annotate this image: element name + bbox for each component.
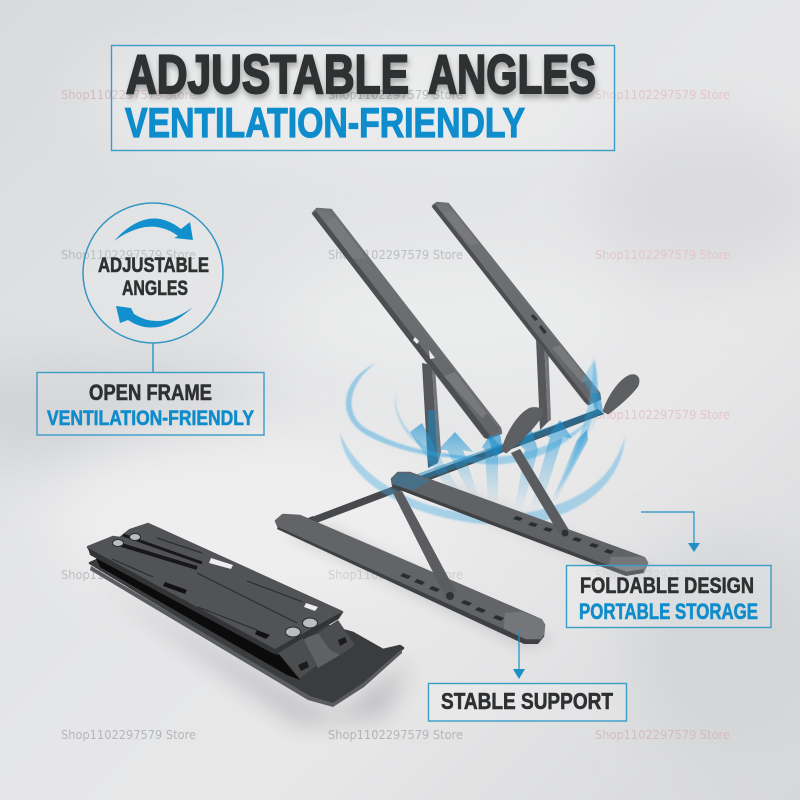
dark interior — [95, 556, 300, 680]
floor shadow — [285, 485, 660, 650]
left riser — [422, 363, 438, 468]
cross bar — [304, 409, 604, 527]
hinge pins — [302, 618, 318, 628]
heading: adjustable angles: ADJUSTABLE — [126, 43, 409, 105]
curved air arcs — [340, 357, 625, 525]
upward air streams — [410, 423, 460, 492]
arrow: stable support pointer — [513, 630, 525, 679]
watermark: store name repeated: Shop1102297579 Store — [595, 88, 730, 102]
label: foldable design: FOLDABLE DESIGN — [580, 573, 754, 598]
right arm — [433, 203, 600, 404]
right riser — [536, 338, 548, 430]
arrow: foldable design pointer — [641, 512, 700, 552]
front base rail — [276, 515, 544, 642]
icon: upper rotation arrow — [114, 218, 193, 241]
base plate — [90, 560, 403, 703]
front base vent slots — [400, 573, 504, 621]
label: ventilation-friendly: VENTILATION-FRIENDLY — [47, 407, 254, 430]
front support leg — [393, 491, 456, 596]
hinge brackets — [278, 638, 317, 678]
floor shadow — [90, 575, 410, 725]
panel: open frame — [37, 372, 264, 435]
top plate — [88, 524, 342, 653]
watermark: store name repeated: Shop1102297579 Store — [595, 408, 730, 422]
panel: foldable design — [566, 566, 771, 628]
watermark: store name repeated — [61, 88, 730, 742]
centre hinge recess — [300, 632, 340, 668]
right end hook — [604, 376, 638, 413]
blue tint over cross bar — [392, 409, 604, 490]
rear base vent slots — [513, 516, 614, 554]
heading: adjustable angles: ANGLES — [428, 43, 596, 105]
icon: lower rotation arrow — [116, 306, 193, 328]
left arm — [313, 209, 501, 438]
watermark: store name repeated: Shop1102297579 Store — [328, 728, 463, 742]
watermark: store name repeated: Shop1102297579 Store — [328, 568, 463, 582]
watermark: store name repeated: Shop1102297579 Store — [595, 248, 730, 262]
panel: title — [112, 43, 614, 150]
illustration: open laptop stand — [276, 203, 660, 650]
watermark: store name repeated: Shop1102297579 Store — [595, 568, 730, 582]
label: open frame: OPEN FRAME — [89, 380, 212, 405]
watermark: store name repeated: Shop1102297579 Store — [61, 248, 196, 262]
rear base rail — [392, 473, 647, 574]
watermark: store name repeated: Shop1102297579 Store — [61, 728, 196, 742]
label: adjustable: ADJUSTABLE — [98, 254, 209, 277]
airflow graphic — [340, 357, 625, 525]
illustration: folded laptop stand — [88, 524, 410, 725]
watermark: store name repeated: Shop1102297579 Store — [61, 568, 196, 582]
panel: stable support — [428, 684, 626, 721]
watermark: store name repeated: Shop1102297579 Store — [595, 728, 730, 742]
watermark: store name repeated: Shop1102297579 Store — [328, 88, 463, 102]
label: angles: ANGLES — [122, 277, 188, 300]
plate slots — [209, 558, 318, 611]
label: stable support: STABLE SUPPORT — [441, 688, 613, 714]
connector line — [152, 343, 154, 372]
watermark: store name repeated: Shop1102297579 Store — [61, 88, 196, 102]
rear support leg — [511, 449, 569, 534]
blue tint over arm and riser feet — [428, 410, 438, 468]
left end hook — [503, 408, 542, 452]
callout: adjustable angles circle — [83, 203, 223, 343]
subheading: ventilation-friendly: VENTILATION-FRIENDLY — [125, 99, 525, 146]
watermark: store name repeated: Shop1102297579 Store — [328, 248, 463, 262]
plate grooves — [112, 538, 303, 630]
